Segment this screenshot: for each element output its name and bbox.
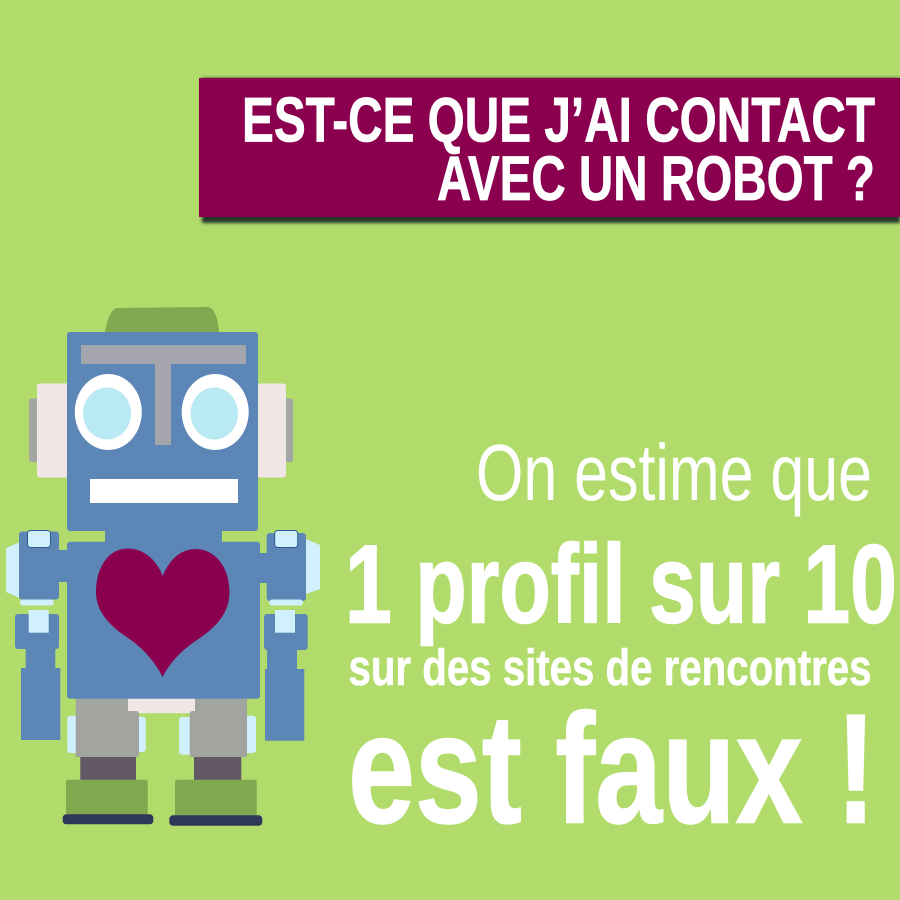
left leg [63, 698, 153, 824]
brow and nose [81, 345, 246, 445]
pelvis [128, 698, 195, 713]
robot illustration [6, 307, 320, 826]
neck [105, 530, 222, 543]
hat [105, 307, 219, 332]
right leg [169, 698, 262, 826]
knee joints [67, 716, 256, 755]
ears [29, 384, 293, 478]
torso [67, 542, 260, 699]
heart [96, 548, 230, 677]
head [67, 332, 258, 531]
title banner [199, 78, 900, 223]
right arm [258, 530, 320, 741]
mouth [90, 479, 238, 503]
right eye [182, 374, 249, 450]
left eye [75, 374, 142, 450]
left arm [6, 530, 69, 740]
